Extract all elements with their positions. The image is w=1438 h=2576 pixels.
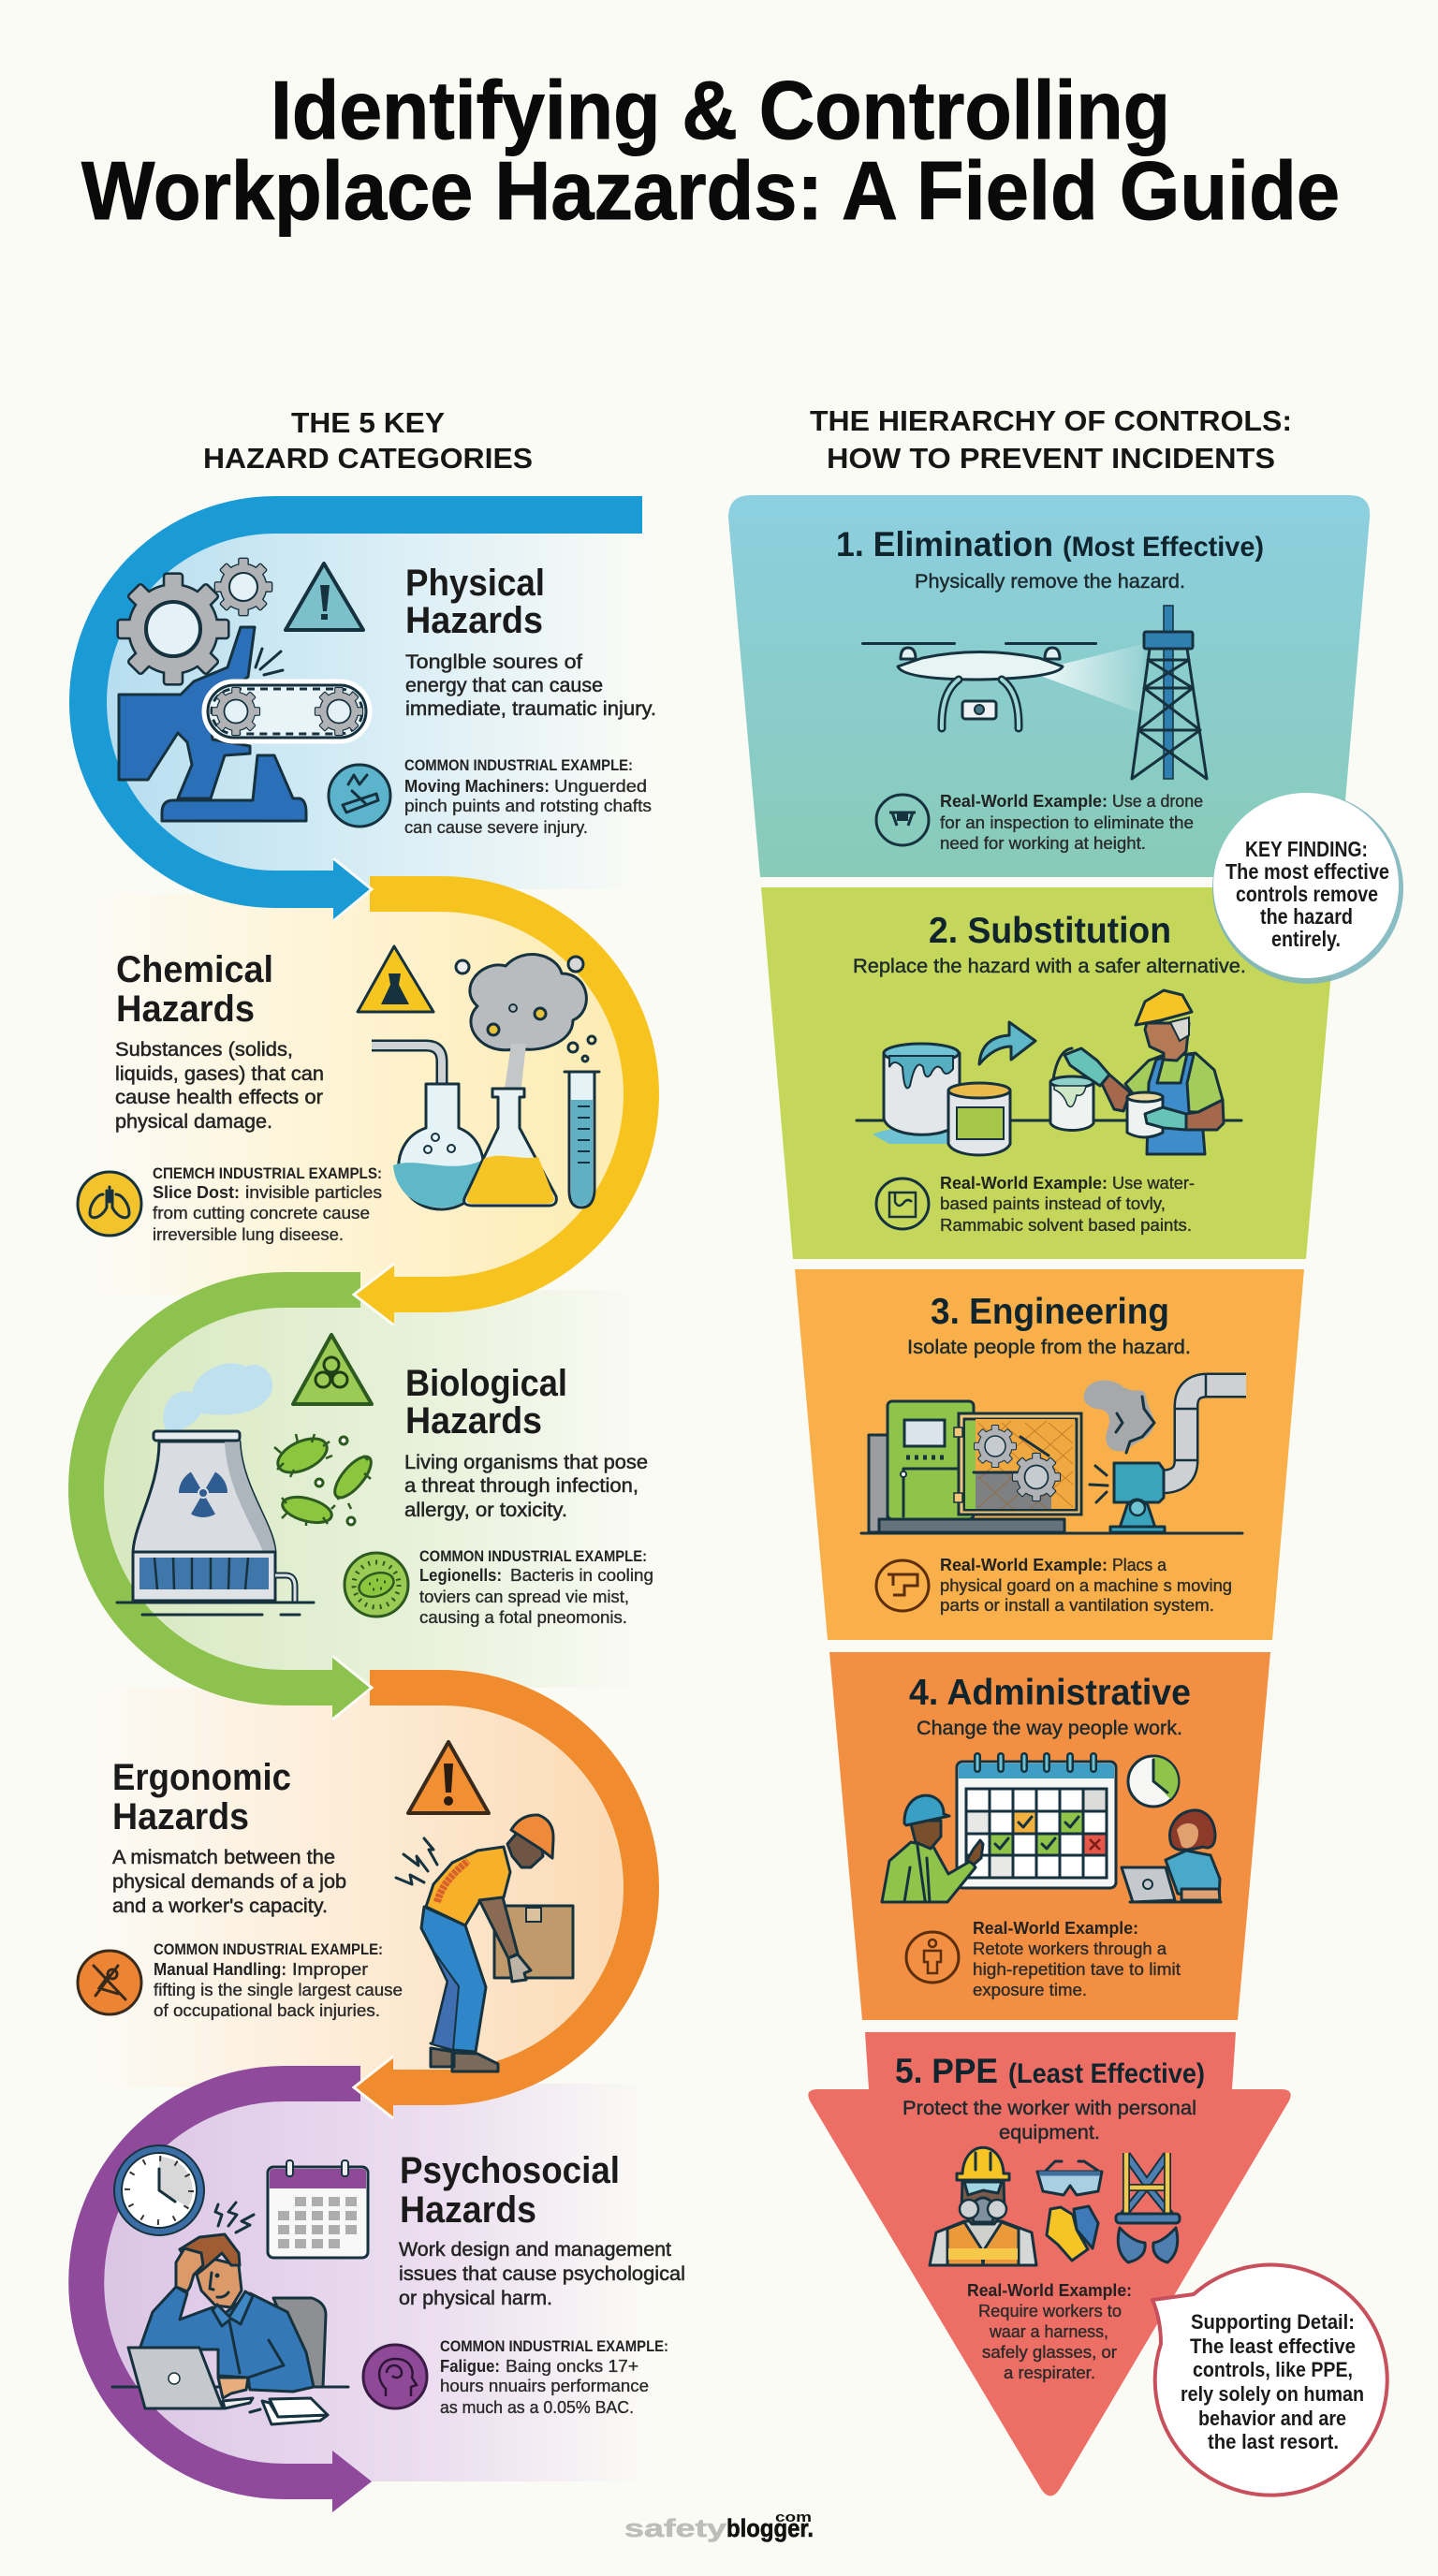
callout: supporting detail: Supporting Detail: bbox=[1191, 2310, 1355, 2334]
text: psychosocial hazards: or physical harm. bbox=[399, 2288, 552, 2309]
text: physical hazards: immediate, traumatic injury. bbox=[405, 698, 656, 720]
text: elimination example bbox=[940, 792, 1203, 853]
text: psychosocial example bbox=[440, 2338, 668, 2417]
panel: biological tint bbox=[85, 1290, 730, 1688]
icon: rota calendar, clock and workers bbox=[882, 1756, 1221, 1902]
arrow: purple arc bbox=[86, 2084, 372, 2512]
text: engineering example: physical goard on a machine s moving bbox=[940, 1576, 1232, 1595]
text: physical hazards: Tonglble soures of bbox=[405, 651, 582, 673]
text: physical example: pinch puints and rotsting chafts bbox=[404, 797, 652, 815]
callout: supporting detail: the last resort. bbox=[1208, 2430, 1339, 2453]
text: psychosocial example: Faligue: bbox=[440, 2357, 500, 2376]
text: physical example: COMMON INDUSTRIAL EXAMPLE: bbox=[404, 757, 633, 774]
text: ergonomic example: COMMON INDUSTRIAL EXAMPLE: bbox=[154, 1941, 383, 1958]
text: physical example bbox=[404, 757, 652, 837]
text: elimination example: need for working at height. bbox=[940, 834, 1146, 853]
text: ergonomic example: Manual Handling: bbox=[154, 1960, 286, 1979]
icon: lungs badge bbox=[78, 1172, 141, 1236]
text: PPE example: a respirater. bbox=[1004, 2364, 1095, 2382]
text: engineering example: Placs a bbox=[1112, 1556, 1167, 1574]
callout: key finding: The most effective bbox=[1225, 859, 1389, 884]
text: chemical hazards: Hazards bbox=[116, 988, 255, 1030]
heading: the 5 key hazard categories: HAZARD CATEGORIES bbox=[203, 442, 533, 475]
panel: 5 PPE bbox=[808, 2032, 1291, 2496]
logo: safetyblogger.com: safety bbox=[624, 2514, 726, 2542]
text: PPE example: Require workers to bbox=[978, 2302, 1122, 2320]
text: biological hazards bbox=[404, 1363, 648, 1521]
arrow: orange arc bbox=[354, 1688, 641, 2118]
panel: 5 PPE: (Least Effective) bbox=[1008, 2058, 1205, 2089]
text: biological example: causing a fotal pneomonis. bbox=[419, 1608, 627, 1627]
text: biological example: Legionells: bbox=[419, 1566, 502, 1585]
icon: paint substitution bbox=[857, 990, 1241, 1155]
icon: stressed office worker bbox=[112, 2149, 368, 2424]
text: physical example: Moving Machiners: bbox=[404, 777, 550, 796]
icon: worker with respirator bbox=[930, 2147, 1036, 2265]
callout: key finding: controls remove bbox=[1236, 882, 1378, 906]
heading: hierarchy of controls: THE HIERARCHY OF CONTROLS: bbox=[810, 404, 1292, 437]
text: ergonomic hazards: and a worker's capacity. bbox=[112, 1895, 328, 1917]
panel: chemical tint bbox=[56, 894, 640, 1295]
text: psychosocial example: COMMON INDUSTRIAL EXAMPLE: bbox=[440, 2338, 668, 2355]
text: chemical hazards: physical damage. bbox=[115, 1111, 272, 1133]
icon: machine guard and ventilation bbox=[861, 1374, 1246, 1533]
text: biological example: toviers can spread vie mist, bbox=[419, 1588, 629, 1606]
text: PPE example: waar a harness, bbox=[989, 2322, 1108, 2341]
text: administrative example: exposure time. bbox=[973, 1981, 1087, 1999]
text: chemical hazards: Chemical bbox=[116, 949, 273, 990]
icon: cooling tower and bacteria bbox=[117, 1335, 377, 1615]
text: elimination example: Real-World Example: bbox=[940, 792, 1108, 811]
panel: 1 elimination: (Most Effective) bbox=[1063, 532, 1264, 563]
title: Identifying & Controlling bbox=[271, 64, 1170, 156]
callout: key finding: entirely. bbox=[1271, 927, 1341, 951]
text: administrative example bbox=[973, 1919, 1181, 1999]
text: biological example: COMMON INDUSTRIAL EXAMPLE: bbox=[419, 1548, 647, 1565]
icon: drone badge bbox=[876, 795, 929, 845]
text: biological hazards: Biological bbox=[405, 1363, 567, 1404]
text: biological hazards: allergy, or toxicity. bbox=[404, 1500, 567, 1521]
title: Workplace Hazards: A Field Guide bbox=[81, 144, 1340, 237]
text: administrative example: Real-World Example: bbox=[973, 1919, 1138, 1938]
panel: 5 PPE: equipment. bbox=[999, 2121, 1100, 2144]
text: ergonomic hazards bbox=[112, 1757, 346, 1917]
text: ergonomic hazards: physical demands of a job bbox=[112, 1871, 346, 1893]
text: administrative example: high-repetition tave to limit bbox=[973, 1960, 1181, 1979]
panel: 4 administrative bbox=[829, 1652, 1270, 2020]
text: ergonomic example bbox=[154, 1941, 403, 2020]
text: engineering example: Real-World Example: bbox=[940, 1556, 1108, 1574]
text: psychosocial example: Baing oncks 17+ bbox=[506, 2357, 638, 2376]
text: chemical hazards: liquids, gases) that can bbox=[115, 1063, 324, 1085]
icon: safety harness bbox=[1116, 2153, 1180, 2262]
icon: manual handling badge bbox=[78, 1951, 141, 2014]
heading: the 5 key hazard categories bbox=[203, 406, 533, 475]
panel: 4 administrative: 4. Administrative bbox=[909, 1673, 1191, 1713]
panel: psychosocial tint bbox=[86, 2084, 730, 2481]
arrow: blue arc bbox=[88, 515, 642, 921]
panel: ergonomic tint bbox=[56, 1688, 642, 2087]
text: chemical hazards bbox=[115, 949, 324, 1133]
heading: hierarchy of controls: HOW TO PREVENT INCIDENTS bbox=[827, 442, 1275, 475]
text: psychosocial hazards: Hazards bbox=[400, 2189, 536, 2231]
text: chemical example: Slice Dost: bbox=[153, 1183, 240, 1202]
callout: supporting detail: behavior and are bbox=[1198, 2407, 1346, 2430]
icon: worker rotation badge bbox=[906, 1932, 959, 1983]
text: PPE example bbox=[967, 2281, 1132, 2382]
callout: key finding bbox=[1212, 793, 1403, 984]
text: engineering example: parts or install a vantilation system. bbox=[940, 1596, 1214, 1615]
text: elimination example: for an inspection to eliminate the bbox=[940, 813, 1194, 832]
icon: drone inspecting tower bbox=[861, 606, 1207, 779]
icon: head badge bbox=[363, 2345, 427, 2408]
text: ergonomic example: fifting is the single largest cause bbox=[154, 1981, 403, 1999]
text: substitution example: Real-World Example: bbox=[940, 1174, 1108, 1193]
callout: supporting detail: controls, like PPE, bbox=[1193, 2358, 1353, 2381]
panel: 2 substitution: 2. Substitution bbox=[929, 911, 1171, 951]
icon: machinery with gears bbox=[119, 559, 370, 821]
text: substitution example: Rammabic solvent based paints. bbox=[940, 1216, 1192, 1235]
text: ergonomic example: of occupational back injuries. bbox=[154, 2001, 380, 2020]
icon: physical example badge bbox=[329, 765, 390, 827]
logo: safetyblogger.com: com bbox=[775, 2510, 812, 2525]
text: chemical example: irreversible lung diseese. bbox=[153, 1225, 344, 1244]
text: physical hazards: Hazards bbox=[405, 600, 543, 641]
panel: 5 PPE: Protect the worker with personal bbox=[902, 2097, 1196, 2119]
icon: worker lifting box bbox=[396, 1742, 573, 2071]
text: psychosocial example: hours nnuairs performance bbox=[440, 2377, 649, 2395]
icon: paint can badge bbox=[876, 1178, 929, 1229]
text: elimination example: Use a drone bbox=[1112, 792, 1203, 811]
panel: 4 administrative: Change the way people work. bbox=[917, 1717, 1182, 1739]
panel: 1 elimination: Physically remove the hazard. bbox=[915, 570, 1185, 593]
text: chemical hazards: cause health effects or bbox=[115, 1087, 323, 1108]
text: substitution example bbox=[940, 1174, 1195, 1235]
text: ergonomic hazards: Hazards bbox=[112, 1796, 249, 1837]
text: administrative example: Retote workers through a bbox=[973, 1939, 1167, 1958]
text: psychosocial hazards: issues that cause psychological bbox=[399, 2263, 685, 2285]
panel: 5 PPE: 5. PPE bbox=[895, 2052, 998, 2090]
panel: 2 substitution: Replace the hazard with a safer alternative. bbox=[853, 955, 1246, 977]
logo: safetyblogger.com: blogger. bbox=[726, 2514, 814, 2542]
callout: supporting detail: The least effective bbox=[1190, 2334, 1356, 2358]
text: physical example: Unguerded bbox=[554, 777, 647, 796]
panel: 1 elimination: 1. Elimination bbox=[836, 525, 1053, 564]
text: biological hazards: Living organisms that pose bbox=[404, 1452, 648, 1473]
text: physical hazards bbox=[405, 563, 656, 720]
text: physical hazards: energy that can cause bbox=[405, 675, 603, 696]
text: chemical example: invisible particles bbox=[245, 1183, 382, 1202]
text: PPE example: safely glasses, or bbox=[982, 2343, 1117, 2362]
icon: chemistry flasks bbox=[358, 946, 599, 1209]
panel: 3 engineering: 3. Engineering bbox=[931, 1292, 1169, 1332]
text: biological hazards: a threat through infection, bbox=[404, 1475, 638, 1497]
text: chemical example bbox=[153, 1165, 382, 1244]
callout: key finding: the hazard bbox=[1260, 904, 1353, 929]
panel: 1 elimination bbox=[728, 495, 1370, 877]
text: physical example: can cause severe injury. bbox=[404, 818, 588, 837]
text: chemical example: CΠEMCH INDUSTRIAL EXAMPLS: bbox=[153, 1165, 382, 1182]
icon: bacteria badge bbox=[345, 1553, 408, 1617]
text: physical hazards: Physical bbox=[405, 563, 545, 604]
text: psychosocial hazards: Work design and management bbox=[399, 2239, 671, 2261]
text: substitution example: based paints instead of tovly, bbox=[940, 1194, 1166, 1213]
text: chemical hazards: Substances (solids, bbox=[115, 1039, 293, 1061]
text: biological hazards: Hazards bbox=[405, 1400, 542, 1442]
icon: work gloves bbox=[1047, 2206, 1098, 2261]
panel: 3 engineering bbox=[795, 1269, 1304, 1640]
heading: hierarchy of controls bbox=[810, 404, 1292, 475]
text: PPE example: Real-World Example: bbox=[967, 2281, 1132, 2300]
panel: physical tint bbox=[88, 515, 730, 889]
arrow: green arc bbox=[86, 1290, 372, 1720]
text: chemical example: from cutting concrete cause bbox=[153, 1204, 370, 1222]
text: psychosocial hazards bbox=[399, 2150, 685, 2309]
text: psychosocial example: as much as a 0.05% BAC. bbox=[440, 2398, 634, 2417]
panel: 3 engineering: Isolate people from the hazard. bbox=[907, 1336, 1191, 1358]
text: ergonomic hazards: A mismatch between the bbox=[112, 1847, 335, 1868]
title bbox=[81, 64, 1340, 237]
panel: 2 substitution bbox=[761, 887, 1339, 1259]
text: biological example bbox=[419, 1548, 653, 1627]
callout: supporting detail: rely solely on human bbox=[1181, 2382, 1364, 2406]
arrow: yellow arc bbox=[354, 894, 641, 1325]
text: ergonomic hazards: Ergonomic bbox=[112, 1757, 291, 1798]
heading: the 5 key hazard categories: THE 5 KEY bbox=[291, 406, 445, 439]
text: ergonomic example: Improper bbox=[292, 1960, 368, 1979]
text: psychosocial hazards: Psychosocial bbox=[400, 2150, 620, 2191]
icon: safety goggles bbox=[1037, 2161, 1102, 2195]
callout: supporting detail bbox=[1152, 2265, 1387, 2496]
text: substitution example: Use water- bbox=[1112, 1174, 1195, 1193]
icon: guard badge bbox=[876, 1560, 929, 1611]
text: engineering example bbox=[940, 1556, 1232, 1615]
text: biological example: Bacteris in cooling bbox=[510, 1566, 653, 1585]
logo: safetyblogger.com bbox=[624, 2510, 814, 2542]
callout: key finding: KEY FINDING: bbox=[1245, 837, 1368, 861]
